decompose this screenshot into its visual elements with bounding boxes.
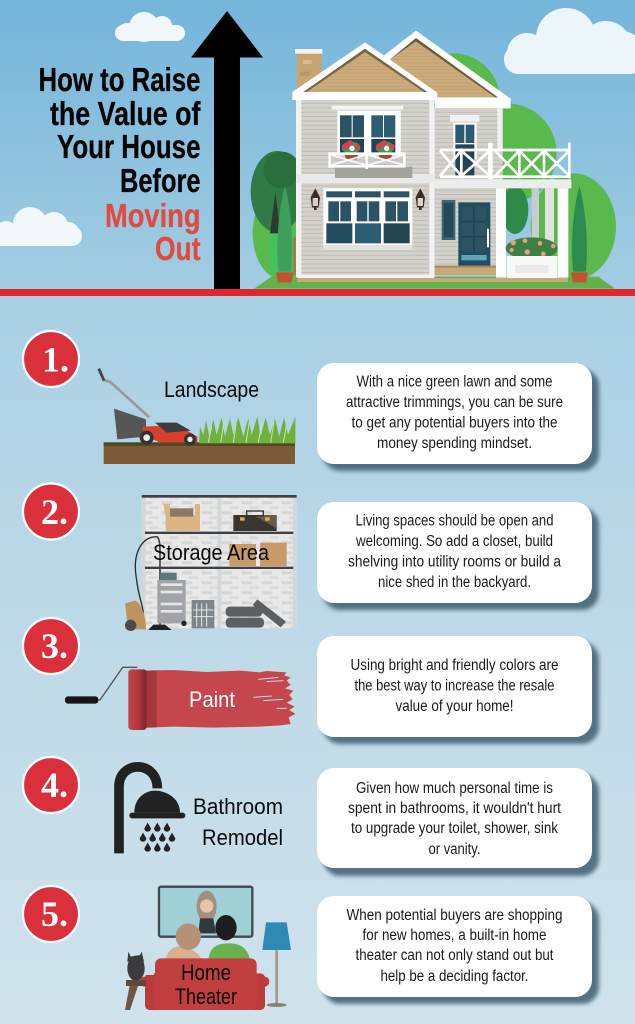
- card 3: Using bright and friendly colors are: [350, 657, 558, 674]
- label: Home Theater: Home: [181, 960, 231, 985]
- columns: [496, 188, 568, 278]
- wall lamps: [311, 188, 425, 210]
- front wall: [296, 100, 435, 278]
- cloud: top left: [115, 12, 185, 42]
- label: Bathroom Remodel: Remodel: [202, 825, 283, 850]
- card 4: to upgrade your toilet, shower, sink: [351, 820, 558, 837]
- title: Your House: [57, 128, 200, 165]
- card 1: [317, 363, 599, 471]
- lower window: [323, 188, 412, 250]
- cardboard boxes: [229, 543, 287, 566]
- badge 5: [23, 886, 79, 942]
- upper windows: [332, 106, 403, 156]
- card 4: spent in bathrooms, it wouldn't hurt: [348, 800, 562, 817]
- label: Bathroom Remodel: [193, 794, 283, 850]
- right wing wall: [434, 108, 503, 182]
- card 1: With a nice green lawn and some: [356, 374, 552, 390]
- card 1: attractive trimmings, you can be sure: [346, 394, 563, 411]
- card 5: for new homes, a built-in home: [362, 927, 546, 944]
- title: the Value of: [50, 95, 201, 132]
- card 5: When potential buyers are shopping: [346, 907, 562, 924]
- label: Landscape: Landscape: [164, 377, 259, 402]
- card 2: nice shed in the backyard.: [378, 574, 531, 591]
- toolbox black: [233, 511, 277, 531]
- cloud: left: [0, 207, 82, 246]
- cloud: top right: [504, 8, 635, 74]
- badge 5: 5.: [41, 894, 68, 934]
- badge 4: [23, 757, 79, 813]
- card 2: shelving into utility rooms or build a: [348, 554, 561, 570]
- title: Out: [155, 230, 200, 267]
- chimney: [295, 49, 322, 88]
- card 4: or vanity.: [428, 841, 480, 858]
- badge 3: [23, 618, 79, 674]
- cat: [125, 952, 154, 1010]
- icon: lawn mower and grass: [99, 369, 295, 464]
- arrow: [191, 11, 263, 290]
- balcony: [434, 143, 571, 188]
- card 3: value of your home!: [396, 698, 514, 715]
- lower background: [0, 290, 635, 1024]
- flower planter: [506, 237, 558, 278]
- cypress right: [571, 186, 588, 282]
- card 4: Given how much personal time is: [356, 780, 553, 797]
- card 5: theater can not only stand out but: [356, 947, 554, 964]
- label: Home Theater: Theater: [175, 984, 237, 1009]
- tires: [226, 599, 286, 628]
- label: Paint: Paint: [189, 687, 236, 712]
- badge 3: 3.: [41, 626, 68, 666]
- title: Moving: [105, 197, 200, 234]
- background sky: [0, 0, 635, 290]
- card 4: [317, 768, 599, 876]
- label: Bathroom Remodel: Bathroom: [193, 794, 283, 819]
- cart: [157, 573, 187, 626]
- badge 2: [23, 484, 79, 540]
- porch: [435, 188, 497, 275]
- house illustration: [251, 31, 616, 289]
- title: Before: [120, 162, 200, 199]
- badge 1: 1.: [42, 340, 69, 380]
- icon: family watching television: [125, 887, 291, 1010]
- icon: storage shelves: [125, 495, 297, 631]
- toolbox wood: [163, 504, 200, 531]
- lawn: [254, 277, 615, 289]
- icon: shower: [119, 767, 185, 853]
- card 3: the best way to increase the resale: [354, 678, 554, 694]
- badge 2: 2.: [41, 492, 68, 532]
- red divider: [0, 289, 635, 296]
- label: Home Theater: [175, 960, 237, 1009]
- card 1: to get any potential buyers into the: [352, 414, 558, 432]
- card 1: money spending mindset.: [377, 435, 532, 452]
- flower boxes: [342, 140, 395, 159]
- bushes behind house: [251, 53, 616, 280]
- card 2: welcoming. So add a closet, build: [355, 533, 553, 550]
- front roof: [292, 42, 437, 100]
- card 2: Living spaces should be open and: [356, 512, 554, 530]
- laundry basket: [192, 600, 214, 628]
- window balcony rail: [328, 152, 406, 169]
- badge 1: [23, 331, 79, 387]
- icon: paint roller: [65, 667, 295, 730]
- title: How to Raise: [38, 61, 200, 98]
- cypress left: [270, 186, 293, 282]
- back roof: [383, 31, 511, 108]
- card 5: help be a deciding factor.: [380, 968, 528, 985]
- card 2: [317, 502, 599, 610]
- label: Storage Area: Storage Area: [153, 540, 269, 565]
- card 5: [317, 896, 599, 1004]
- badge 4: 4.: [41, 765, 68, 805]
- vacuum cleaner: [125, 537, 172, 631]
- card 3: [317, 636, 599, 744]
- title: [38, 61, 201, 267]
- floor lamp: [262, 922, 291, 1007]
- door: [458, 202, 490, 266]
